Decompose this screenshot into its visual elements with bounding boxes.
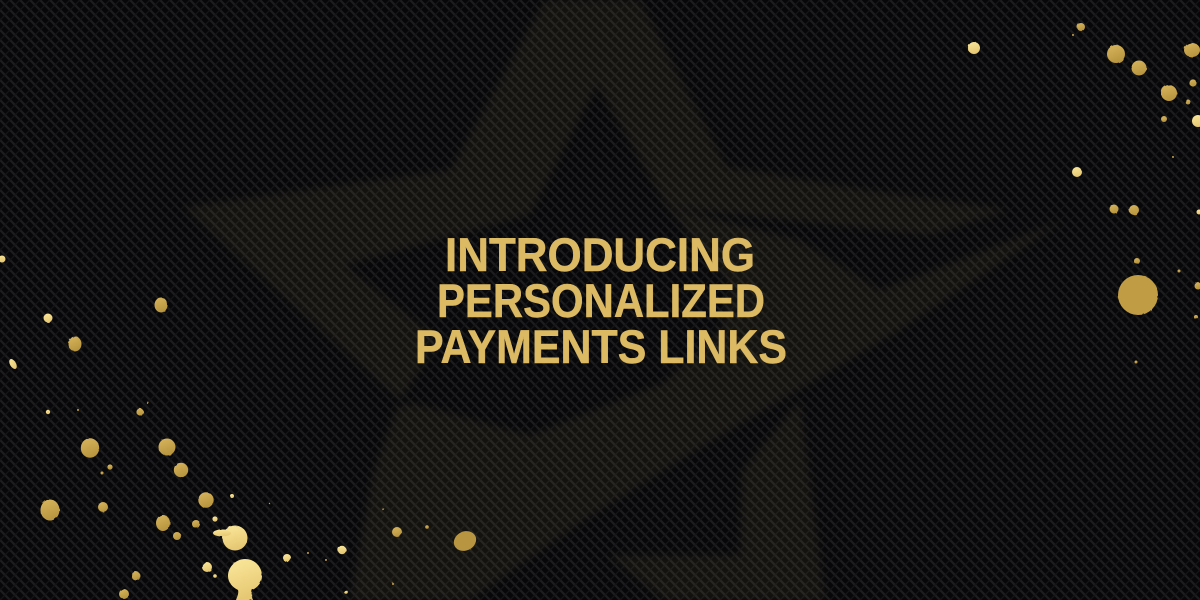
title: INTRODUCING xyxy=(445,228,755,281)
gold splatter: left edge xyxy=(0,256,168,370)
title xyxy=(415,228,787,373)
star watermark xyxy=(183,0,1065,600)
gold splatter: top right xyxy=(968,23,1200,177)
gold splatter: right edge xyxy=(1110,204,1200,364)
title: PERSONALIZED xyxy=(437,274,765,327)
gold splatter: bottom left xyxy=(40,402,479,600)
title: PAYMENTS LINKS xyxy=(415,320,787,373)
